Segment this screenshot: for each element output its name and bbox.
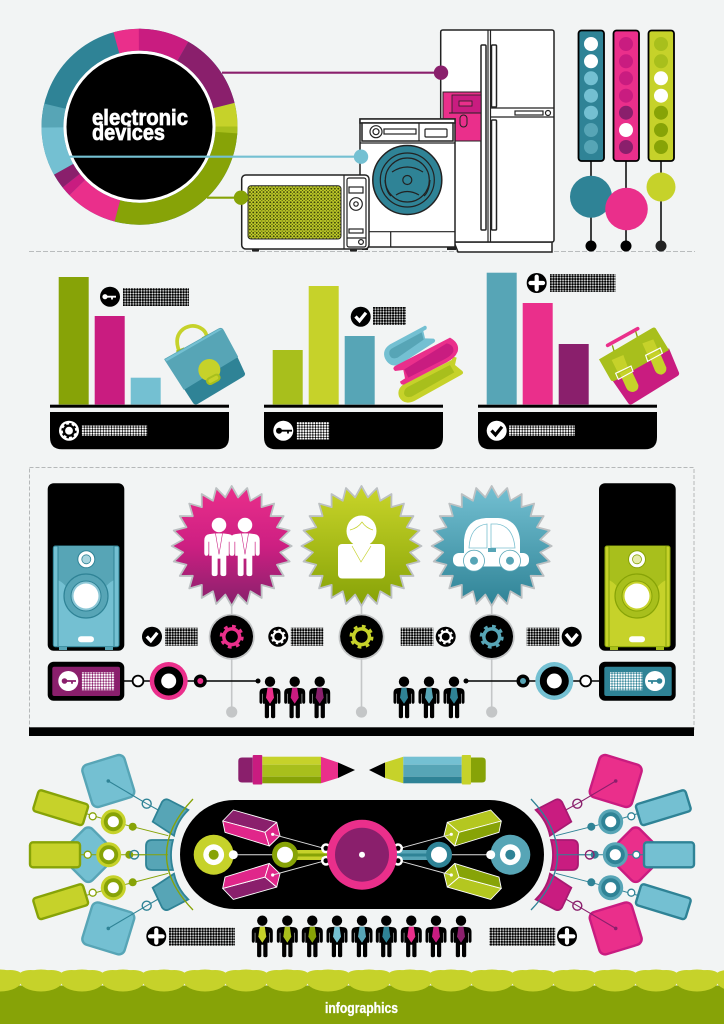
fan diagram left (30, 754, 193, 956)
people group: teal ties (394, 676, 464, 718)
dashed frame (30, 468, 694, 730)
shelf panel 2 (264, 405, 443, 449)
shelf panel 3 (478, 405, 657, 449)
label: check row (142, 627, 198, 647)
footer text: infographics (325, 1001, 398, 1017)
remote label left (48, 662, 124, 701)
refrigerator (441, 30, 554, 252)
connector: fridge (222, 66, 448, 80)
gear node: teal (469, 614, 515, 660)
timeline stems (226, 600, 497, 718)
donut title (92, 105, 188, 145)
bottom label right (489, 926, 577, 946)
label: gear row left (268, 627, 323, 647)
column meter: pink (605, 30, 648, 252)
label: plus (527, 273, 616, 293)
bottom label left (146, 926, 235, 946)
label: chevron row (527, 627, 582, 647)
bar chart 3 (487, 273, 589, 404)
gear node: lime (338, 614, 384, 660)
bar chart 1 (59, 277, 161, 404)
central capsule (180, 800, 544, 909)
connector: washing machine (68, 150, 368, 164)
icon: pink and lime satchel (599, 328, 679, 405)
donut title: devices (92, 120, 165, 145)
icon: books (384, 326, 463, 403)
black divider bar (29, 727, 694, 736)
column meter: lime (646, 30, 676, 252)
people row (252, 916, 472, 957)
connector left (124, 662, 260, 700)
remote label right (599, 662, 676, 701)
shelf panel 1 (50, 405, 229, 449)
label: gear row right (401, 627, 456, 647)
gear node: pink (209, 614, 255, 660)
badge: two people (172, 486, 292, 606)
washing machine (360, 119, 456, 250)
speaker right (599, 483, 676, 651)
fridge water dispenser (443, 92, 481, 141)
people group: pink ties (260, 676, 330, 718)
column meter: teal (570, 30, 612, 252)
donut title: electronic (92, 105, 188, 130)
badge: car (432, 486, 552, 606)
icon: blue briefcase (165, 326, 245, 405)
speaker left (48, 483, 124, 651)
connector: microwave (207, 190, 248, 205)
connector right (464, 662, 600, 700)
footer band (0, 968, 724, 1024)
fan diagram right (531, 754, 694, 956)
microwave (242, 175, 369, 252)
label: key 1 (100, 287, 189, 307)
badge: businessman (302, 486, 422, 606)
label: check (351, 307, 406, 327)
pencil right (369, 755, 486, 784)
donut chart: electronic devices (52, 40, 226, 214)
bar chart 2 (273, 286, 375, 404)
pencil left (238, 755, 355, 784)
